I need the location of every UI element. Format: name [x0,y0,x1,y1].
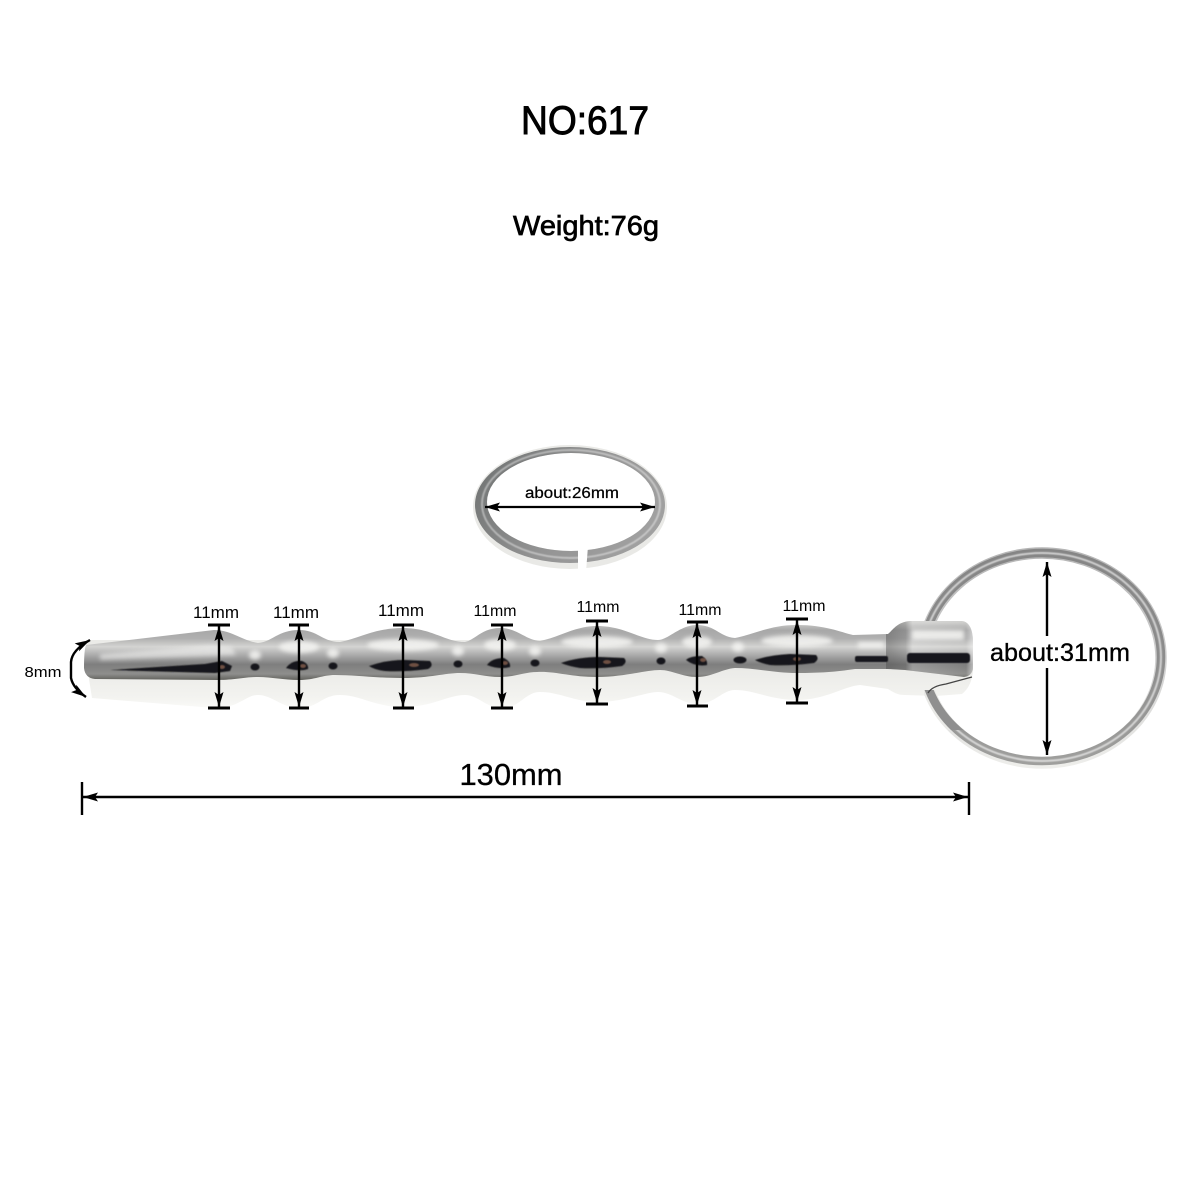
bead measurement 7: 11mm [782,598,826,615]
length dimension line [82,782,969,815]
collar lip line [928,677,972,693]
large ring [923,553,1161,763]
rod highlights [100,630,964,660]
bead measurement 6 [678,602,722,706]
tip diameter [24,640,90,697]
bead measurement 2 [273,603,319,708]
bead measurement 1: 11mm [193,603,239,622]
bead measurement 1 [193,603,239,708]
ring diameter label: about:26mm [525,485,619,502]
bead measurement 4 [474,603,516,708]
rod collar shading [886,621,974,678]
bead measurement 4: 11mm [474,603,516,620]
ring arrow upper [1046,562,1048,636]
bead measurement 3 [378,601,424,708]
large ring lower segment over collar [924,676,972,730]
total length [82,757,969,815]
rod metal body [84,621,973,680]
ring diameter arrow [485,506,655,508]
small split ring with diameter [473,445,667,572]
weight text: Weight:76g [513,210,659,241]
rod dark reflections [110,653,970,673]
rod warm reflection tints [219,657,801,669]
length label: 130mm [460,757,562,792]
ring diameter value: about:31mm [990,639,1130,667]
title: NO:617 [521,99,649,143]
rod lower reflection [86,640,973,708]
ring arrow lower [1046,668,1048,755]
beaded rod [84,621,974,708]
dimension diagram [25,106,1167,815]
bead measurement 5: 11mm [576,599,620,616]
bead measurement 2: 11mm [273,603,319,622]
small ring metal [473,445,667,572]
bead measurement 5 [576,599,620,704]
bead measurement 7 [782,598,826,703]
bead measurement 3: 11mm [378,601,424,620]
tip bracket arrow [71,640,90,697]
bead measurement 6: 11mm [678,602,722,619]
tip label: 8mm [24,664,62,681]
lower ring piece [924,690,963,730]
